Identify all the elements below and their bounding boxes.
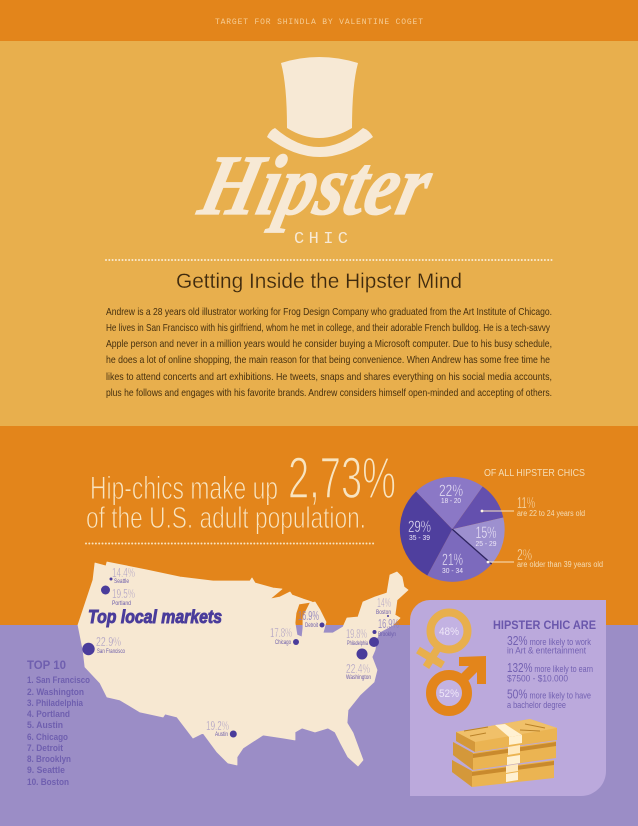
- headline: population share: [86, 446, 396, 535]
- marker: Portland: 19.5%: [112, 586, 135, 601]
- callout: 11 percent: 11%: [517, 495, 535, 512]
- marker: Boston: 14%: [377, 595, 391, 610]
- pie chart: age groups: 15%: [476, 523, 496, 542]
- marker: Brooklyn: Brooklyn: [378, 632, 396, 638]
- stat list: 132% more likely to earn: [507, 660, 593, 675]
- intro paragraph: Apple person and never in a million years would he consider buying a Microsoft computer. Due to his busy schedule,: [106, 339, 552, 350]
- marker: Detroit: [298, 608, 324, 629]
- top 10 list: 3. Philadelphia: [27, 698, 84, 708]
- dotted divider: [86, 542, 374, 544]
- panel heading: HIPSTER CHIC ARE: [493, 618, 596, 632]
- callout: 2 percent: are older than 39 years old: [517, 560, 603, 569]
- callout: 11 percent: are 22 to 24 years old: [517, 509, 585, 518]
- callout: 2 percent: [487, 547, 603, 569]
- map: United States: [78, 562, 408, 766]
- top 10 list: 1. San Francisco: [27, 675, 90, 685]
- top 10 list: [27, 658, 90, 787]
- stat list: $7500 - $10.000: [507, 672, 568, 684]
- marker: Portland: Portland: [112, 601, 131, 607]
- top bar background: [0, 0, 638, 41]
- pie chart: age groups: 25 - 29: [476, 541, 497, 548]
- marker: Philadelphia: [346, 626, 379, 647]
- marker: Boston: [376, 595, 391, 617]
- marker: Seattle: 14.4%: [112, 565, 135, 580]
- icon: female symbol 48%: [418, 612, 468, 667]
- marker: Chicago: 17.8%: [270, 625, 292, 640]
- dotted divider: [106, 259, 552, 261]
- marker: Portland: [101, 586, 135, 607]
- top 10 list: 4. Portland: [27, 709, 70, 719]
- gold header panel: [0, 41, 638, 426]
- pie chart: age groups: 22%: [439, 481, 463, 500]
- top 10 list: 9. Seattle: [27, 765, 65, 775]
- pie chart: age groups: 18 - 20: [441, 498, 461, 505]
- top 10 list: 5. Austin: [27, 720, 63, 730]
- title: Hipster: Hipster: [190, 137, 442, 233]
- subtitle: CHIC: CHIC: [294, 230, 348, 249]
- marker: Detroit: Detroit: [305, 623, 318, 629]
- marker: San Francisco: [82, 634, 125, 655]
- top 10 list: 6. Chicago: [27, 732, 68, 742]
- callout: 11 percent: [481, 495, 585, 518]
- callout: 2 percent: 2%: [517, 547, 532, 564]
- stat list: 32% more likely to work: [507, 633, 591, 648]
- marker: Boston: Boston: [376, 610, 391, 616]
- map title: Top local markets: [88, 607, 222, 627]
- pie chart: age groups: [400, 477, 505, 582]
- icon: male symbol 52%: 52%: [439, 688, 459, 700]
- stat list: a bachelor degree: [507, 699, 566, 710]
- icon: male symbol 52%: [431, 656, 486, 711]
- marker: Chicago: Chicago: [275, 640, 291, 646]
- marker: Washington: [346, 648, 371, 681]
- marker: Detroit: 16.9%: [298, 608, 319, 623]
- top 10 list: 8. Brooklyn: [27, 754, 71, 764]
- headline: population share: 2,73%: [288, 446, 396, 511]
- panel: hipster chic are: [410, 600, 606, 796]
- purple lower band: [0, 625, 638, 826]
- headline: population share: of the U.S. adult population.: [86, 500, 366, 535]
- marker: San Francisco: 22.9%: [96, 634, 121, 649]
- marker: Chicago: [270, 625, 299, 646]
- intro paragraph: [106, 307, 552, 399]
- heading: Getting Inside the Hipster Mind: [176, 270, 462, 293]
- top 10 list: TOP 10: [27, 658, 66, 672]
- top 10 list: 7. Detroit: [27, 743, 63, 753]
- stat list: in Art & entertainment: [507, 644, 586, 656]
- marker: Seattle: Seattle: [114, 579, 130, 585]
- intro paragraph: Andrew is a 28 years old illustrator working for Frog Design Company who graduated from the Art Institute of Chicago.: [106, 307, 552, 318]
- pie caption: OF ALL HIPSTER CHICS: [484, 467, 585, 479]
- headline: population share: Hip-chics make up: [90, 470, 278, 506]
- marker: Brooklyn: 16.9%: [378, 616, 399, 631]
- pie chart: age groups: 30 - 34: [442, 568, 463, 575]
- marker: Austin: 19.2%: [206, 718, 229, 733]
- marker: Philadelphia: Philadelphia: [347, 641, 368, 647]
- stat list: 50% more likely to have: [507, 686, 591, 702]
- marker: Philadelphia: 19.8%: [346, 626, 367, 641]
- intro paragraph: he does a lot of online shopping, the main reason for that being convenience. When Andrew has some free time he: [106, 355, 550, 366]
- marker: Seattle: [110, 565, 135, 585]
- intro paragraph: plus he follows and engages with his favorite brands. Andrew considers himself open-minded and accepting of others.: [106, 388, 552, 399]
- top 10 list: 10. Boston: [27, 777, 69, 787]
- icon: top hat: [267, 57, 373, 157]
- icon: money stacks: [452, 719, 557, 787]
- top 10 list: 2. Washington: [27, 687, 84, 697]
- marker: Washington: 22.4%: [346, 661, 370, 676]
- orange statistics band: [0, 426, 638, 625]
- pie chart: age groups: 35 - 39: [409, 535, 430, 542]
- marker: Brooklyn: [372, 616, 399, 638]
- marker: Austin: Austin: [215, 732, 228, 738]
- pie chart: age groups: 29%: [408, 517, 431, 536]
- stat list: [507, 633, 593, 710]
- icon: female symbol 48%: 48%: [439, 626, 459, 638]
- intro paragraph: likes to attend concerts and art exhibitions. He tweets, snaps and shares everything on his social media accounts,: [106, 372, 552, 383]
- marker: Washington: Washington: [346, 675, 371, 681]
- marker: Austin: [206, 718, 237, 738]
- marker: San Francisco: San Francisco: [97, 649, 125, 655]
- credit line: TARGET FOR SHINDLA BY VALENTINE COGET: [215, 18, 423, 27]
- pie chart: age groups: 21%: [442, 550, 463, 569]
